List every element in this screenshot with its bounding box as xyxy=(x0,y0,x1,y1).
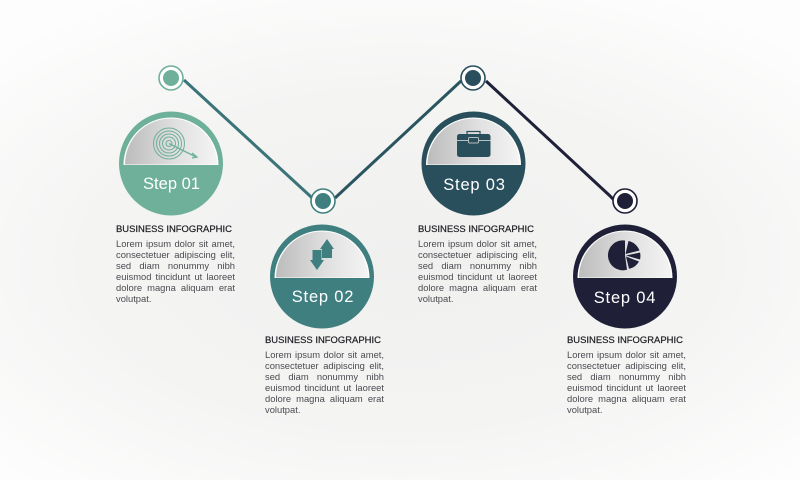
text block: step 04: sed diam nonummy nibh xyxy=(567,371,686,382)
text block: step 04: euismod tincidunt ut laoreet xyxy=(567,382,686,393)
text block: step 02: dolore magna aliquam erat xyxy=(265,393,384,404)
text block: step 01 xyxy=(116,224,235,304)
text block: step 04: Lorem ipsum dolor sit amet, xyxy=(567,348,686,360)
text block: step 04: consectetuer adipiscing elit, xyxy=(567,360,686,371)
label: Step 04: Step 04 xyxy=(594,289,656,307)
icon: target with arrow xyxy=(154,128,197,159)
text block: step 01: BUSINESS INFOGRAPHIC xyxy=(116,224,232,234)
text block: step 04: BUSINESS INFOGRAPHIC xyxy=(567,334,683,346)
icon: briefcase xyxy=(457,132,490,157)
text block: step 02: euismod tincidunt ut laoreet xyxy=(265,382,384,393)
node 1 xyxy=(159,66,183,90)
connector line: node 2 to node 3 xyxy=(335,81,461,198)
step 04 badge xyxy=(573,224,677,328)
node 2 xyxy=(311,189,335,213)
text block: step 03: sed diam nonummy nibh xyxy=(418,260,537,271)
text block: step 04: volutpat. xyxy=(567,404,602,415)
icon: pie chart xyxy=(608,240,640,270)
step 02 badge xyxy=(270,224,374,328)
node 4 xyxy=(613,189,637,213)
text block: step 03: volutpat. xyxy=(418,293,453,304)
connector line: node 3 to node 4 xyxy=(486,81,614,200)
text block: step 03: dolore magna aliquam erat xyxy=(418,282,537,293)
text block: step 03: consectetuer adipiscing elit, xyxy=(418,249,537,260)
label: Step 02: Step 02 xyxy=(292,288,354,306)
icon: up and down arrows xyxy=(310,239,334,270)
connector line: node 1 to node 2 xyxy=(184,80,314,200)
text block: step 03: euismod tincidunt ut laoreet xyxy=(418,271,537,282)
text block: step 01: volutpat. xyxy=(116,293,151,304)
step 03 badge xyxy=(422,112,526,216)
text block: step 01: consectetuer adipiscing elit, xyxy=(116,249,235,260)
text block: step 03: BUSINESS INFOGRAPHIC xyxy=(418,224,534,234)
step 01 badge xyxy=(119,112,223,216)
text block: step 02: BUSINESS INFOGRAPHIC xyxy=(265,334,381,346)
text block: step 03: Lorem ipsum dolor sit amet, xyxy=(418,238,537,248)
node 3 xyxy=(461,66,485,90)
text block: step 02: volutpat. xyxy=(265,404,300,415)
text block: step 02: Lorem ipsum dolor sit amet, xyxy=(265,348,384,360)
text block: step 01: dolore magna aliquam erat xyxy=(116,282,235,293)
text block: step 01: Lorem ipsum dolor sit amet, xyxy=(116,238,235,248)
text block: step 04 xyxy=(567,334,686,415)
text block: step 02: consectetuer adipiscing elit, xyxy=(265,360,384,371)
label: Step 01: Step 01 xyxy=(143,175,200,193)
text block: step 02: sed diam nonummy nibh xyxy=(265,371,384,382)
text block: step 02 xyxy=(265,334,384,415)
text block: step 01: sed diam nonummy nibh xyxy=(116,260,235,271)
text block: step 01: euismod tincidunt ut laoreet xyxy=(116,271,235,282)
label: Step 03: Step 03 xyxy=(443,176,506,194)
text block: step 03 xyxy=(418,224,537,304)
text block: step 04: dolore magna aliquam erat xyxy=(567,393,686,404)
